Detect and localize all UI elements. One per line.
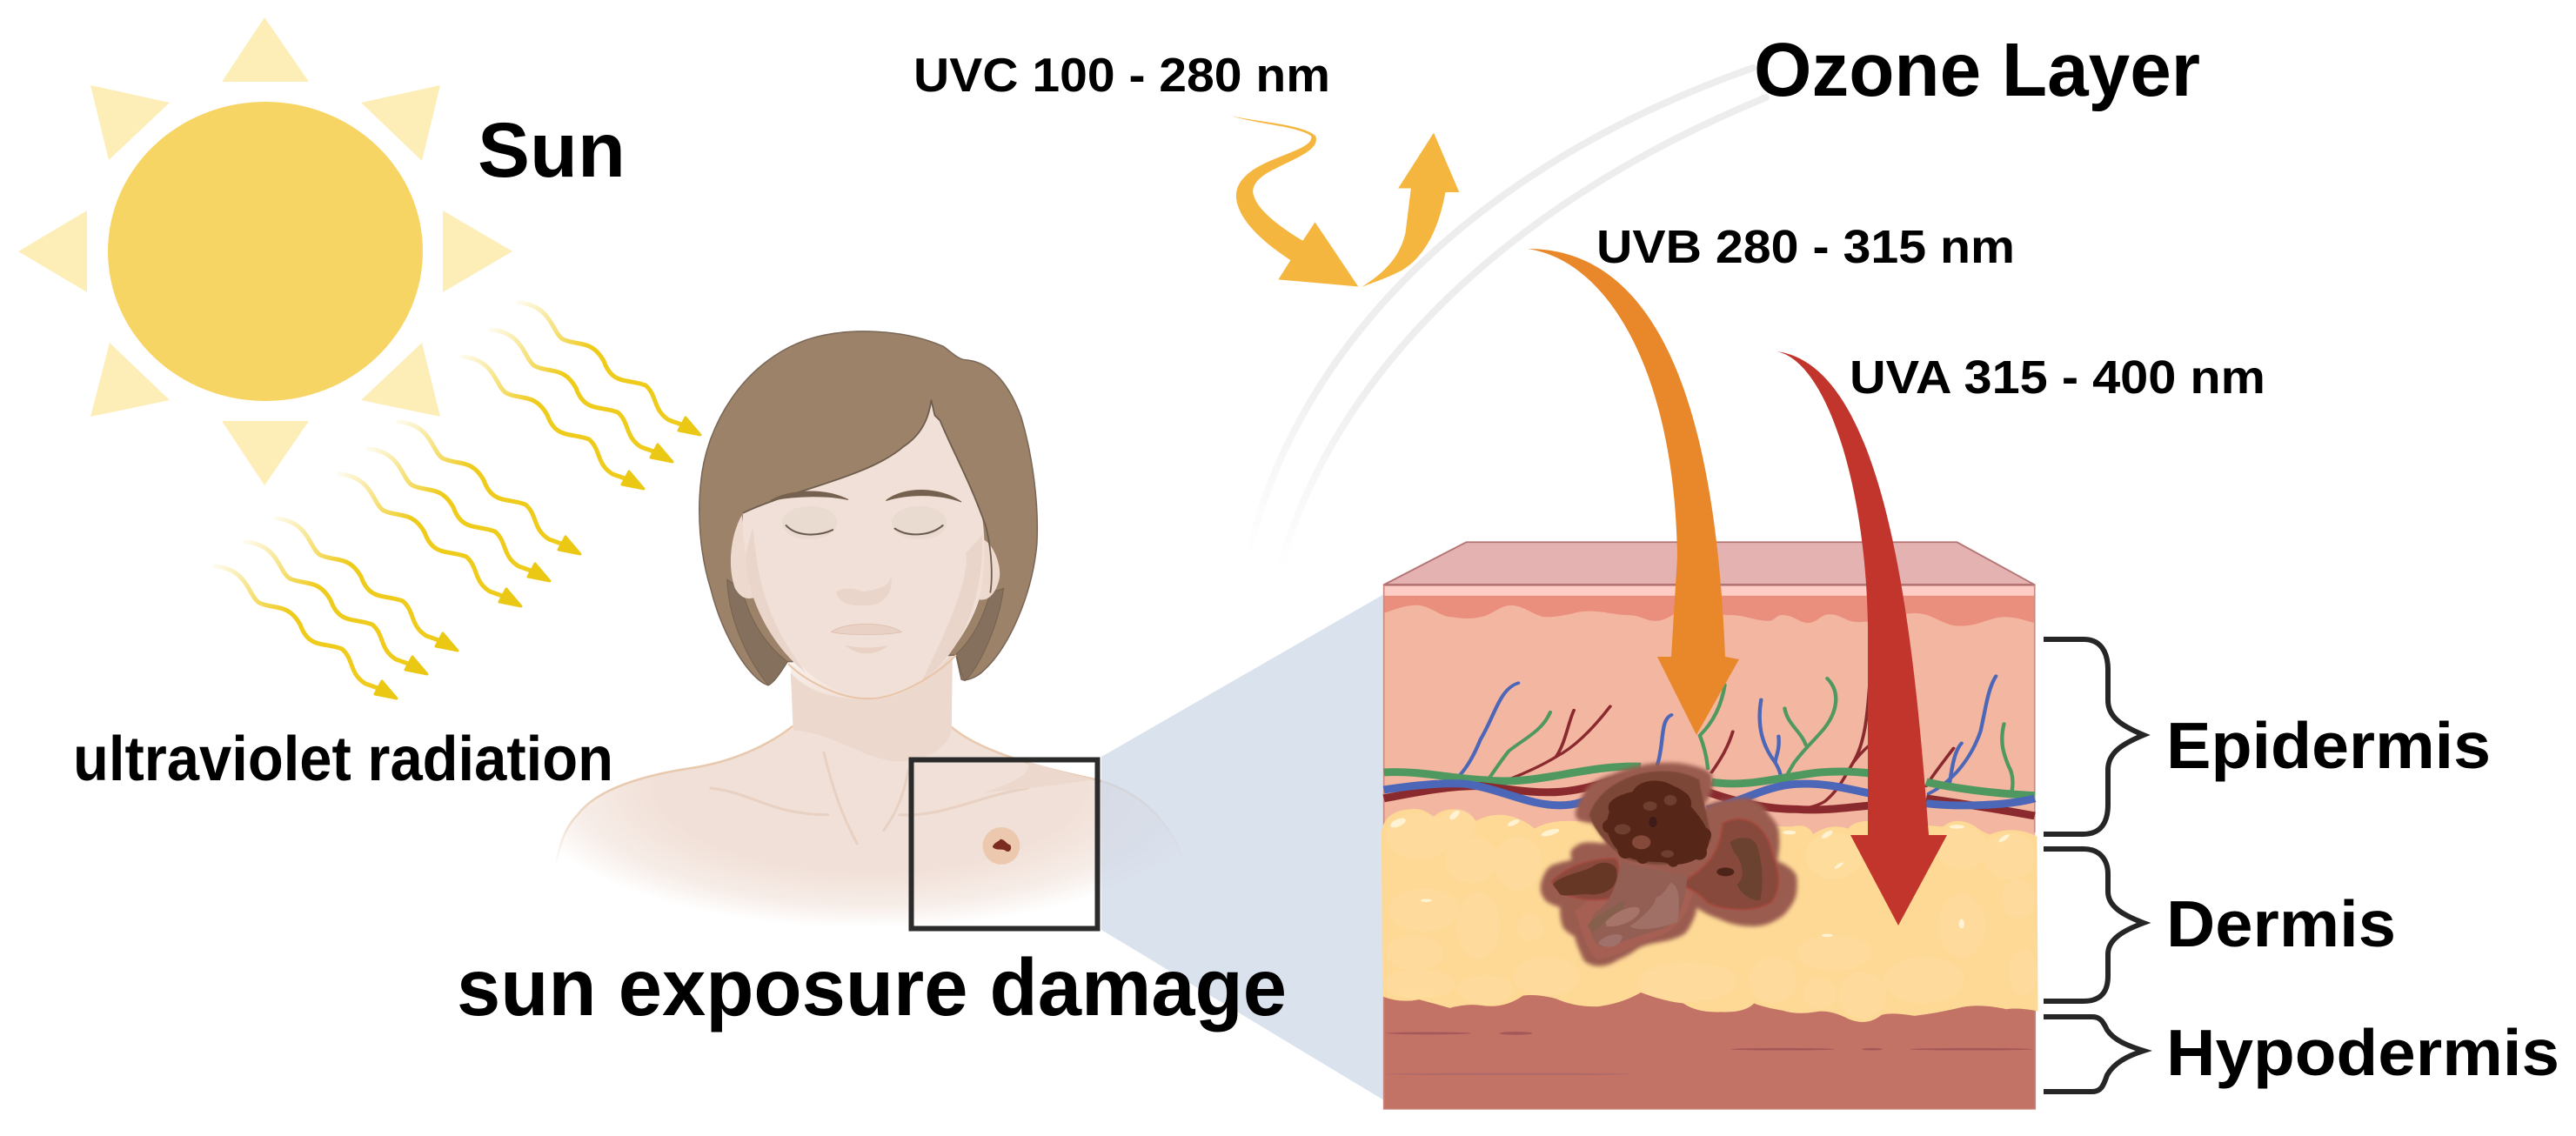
ultraviolet radiation wavy arrows [215, 303, 700, 698]
label: ultraviolet radiation: ultraviolet radiation [73, 725, 613, 794]
arrow: UVB into epidermis [1528, 249, 1739, 735]
label: Epidermis: Epidermis [2166, 709, 2491, 782]
heading: Sun: Sun [478, 106, 626, 193]
left lobe inner [1551, 859, 1619, 899]
pale blob [1605, 907, 1640, 926]
pale lower blob [1598, 934, 1623, 947]
shoulders and chest [555, 651, 1186, 928]
label: Dermis: Dermis [2166, 887, 2396, 960]
mottling [1615, 795, 1676, 858]
magnification cone [1101, 594, 1384, 1100]
lower pale patch [1629, 883, 1679, 929]
right lobe [1679, 819, 1778, 910]
icon: sun [18, 17, 512, 485]
skin top surface [1384, 542, 2035, 585]
top edge line [1384, 582, 2035, 587]
fat highlights [1388, 809, 2011, 937]
hypodermis layer base [1384, 949, 2035, 1109]
top inner [1589, 772, 1711, 865]
upper shoulder shade [984, 762, 1094, 792]
grey-green patch [1588, 901, 1625, 932]
hair underside right [956, 589, 1004, 681]
neck shadow [791, 651, 953, 762]
lower lip shadow [845, 645, 888, 653]
face [743, 400, 985, 698]
lower reddish body [1575, 861, 1694, 959]
label: sun exposure damage: sun exposure damage [457, 942, 1287, 1032]
hair back [699, 331, 1037, 685]
skin lesion on chest [983, 827, 1020, 865]
left dark patch [1553, 863, 1617, 896]
nose [836, 576, 892, 605]
panel: skin cross-section [1382, 542, 2038, 1109]
hair underside left [727, 579, 787, 685]
label: UVA: UVA 315 - 400 nm [1850, 351, 2265, 404]
hypodermis streaks [1386, 1032, 2032, 1075]
melanoma tumor [1541, 763, 1797, 966]
wavy upper layer [1384, 596, 2035, 626]
label: UVB: UVB 280 - 315 nm [1596, 221, 2015, 273]
skin outer strip [1384, 585, 2035, 597]
fat lobules [1384, 809, 2037, 1019]
label: Hypodermis: Hypodermis [2166, 1016, 2559, 1089]
brace: hypodermis [2044, 1017, 2144, 1092]
fringe line [743, 400, 992, 593]
lower body [1590, 861, 1688, 946]
arrow: UVA into dermis [1776, 351, 1947, 926]
side edges [1384, 585, 2035, 832]
main vessels [1384, 766, 2035, 816]
right dark patch [1730, 838, 1763, 900]
fat layer [1382, 809, 2038, 1022]
closed eyes [786, 525, 943, 535]
face shading [746, 526, 806, 672]
eye sockets [782, 506, 837, 539]
brace: dermis [2044, 849, 2144, 1001]
tumor halo [1541, 763, 1797, 966]
small dark spot [1716, 867, 1734, 876]
eye socket right [892, 506, 947, 539]
epidermis base [1384, 596, 2035, 867]
dark core [1649, 817, 1657, 827]
jaw line [788, 655, 956, 698]
figure: woman [555, 331, 1186, 928]
arrow: UVC reflected incoming [1231, 116, 1459, 287]
blood and lymph vessel branches [1455, 676, 2012, 809]
brace: epidermis [2044, 639, 2144, 834]
top dark cluster [1602, 781, 1711, 867]
eyebrows [771, 490, 961, 502]
ear left [731, 515, 755, 598]
label: UVC: UVC 100 - 280 nm [913, 48, 1330, 102]
collarbones [711, 752, 1028, 844]
label: Ozone Layer: Ozone Layer [1754, 28, 2200, 112]
shoulder outline [555, 726, 1186, 865]
arrow: UVC reflected outgoing [1361, 133, 1459, 287]
ear right [980, 539, 1000, 600]
lips [832, 624, 901, 635]
magnifier square [912, 760, 1098, 929]
ozone layer arcs [1248, 68, 1766, 591]
